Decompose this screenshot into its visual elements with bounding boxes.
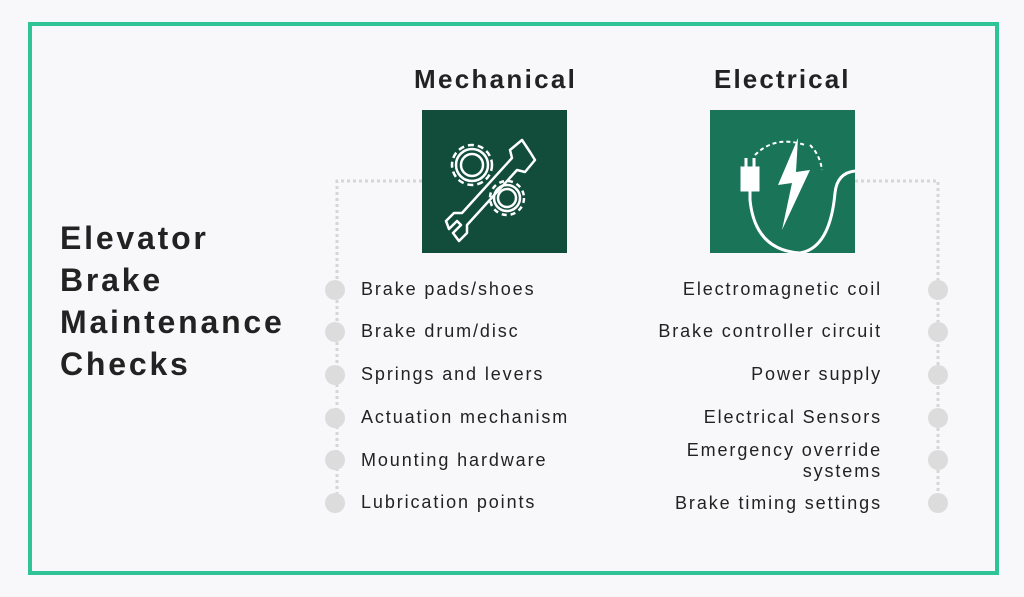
- list: electrical: [928, 280, 948, 513]
- text: Power supply: [751, 364, 882, 384]
- icon: plug and lightning: [710, 110, 855, 253]
- text: Brake controller circuit: [658, 321, 882, 341]
- text: Brake timing settings: [675, 493, 882, 513]
- title: Brake: [60, 262, 163, 298]
- text: Mounting hardware: [361, 450, 547, 470]
- text: Electrical Sensors: [704, 407, 882, 427]
- text: Brake pads/shoes: [361, 279, 536, 299]
- title: Maintenance: [60, 304, 285, 340]
- title: Checks: [60, 346, 191, 382]
- text: Springs and levers: [361, 364, 544, 384]
- text: Brake drum/disc: [361, 321, 520, 341]
- title: [60, 220, 285, 382]
- text: Electromagnetic coil: [683, 279, 882, 299]
- heading: Mechanical: Mechanical: [414, 64, 577, 94]
- text: Lubrication points: [361, 492, 536, 512]
- list: mechanical: [325, 280, 345, 513]
- icon: gears and wrench: [422, 110, 567, 253]
- title: Elevator: [60, 220, 209, 256]
- text: Actuation mechanism: [361, 407, 569, 427]
- text: systems: [803, 461, 882, 481]
- text: Emergency override: [687, 440, 882, 460]
- heading: Electrical: Electrical: [714, 64, 851, 94]
